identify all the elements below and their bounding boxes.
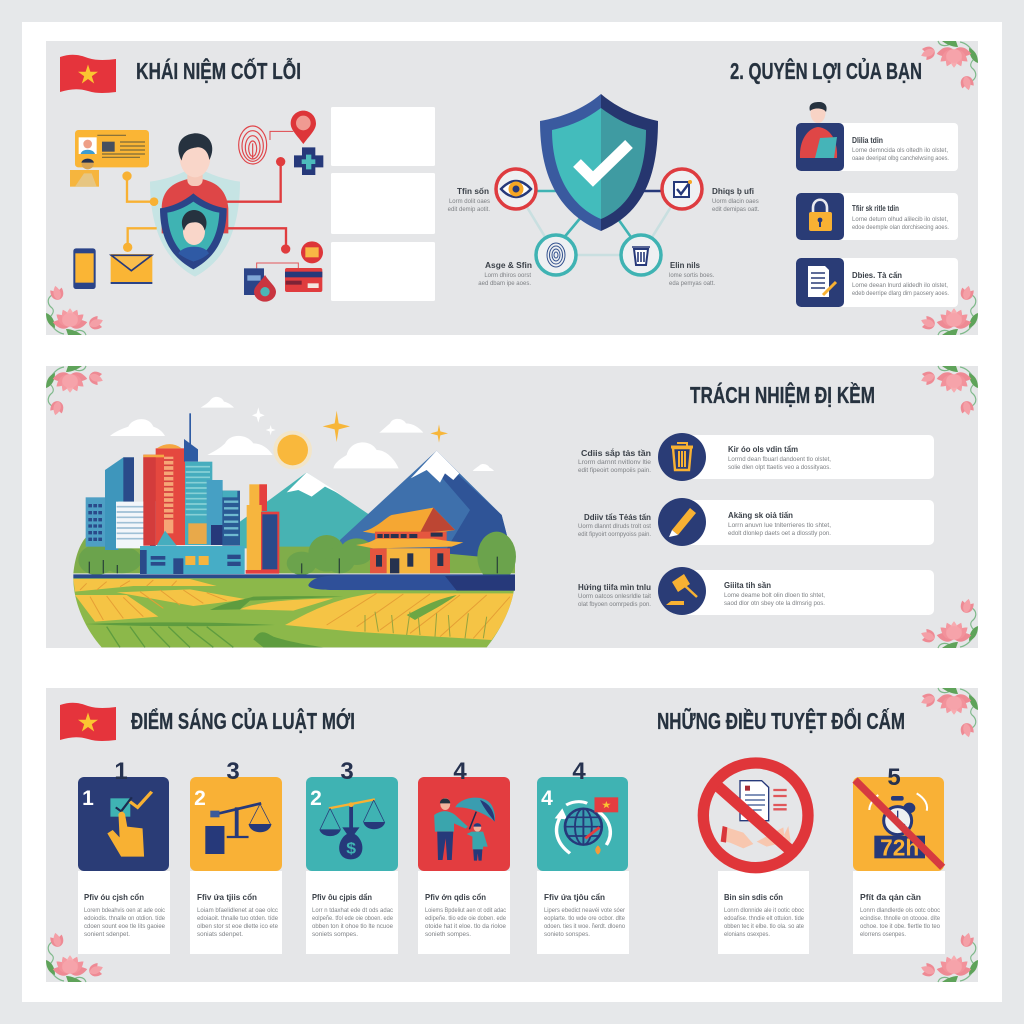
icon: fingerprint [239,126,293,164]
card 4 [418,758,510,954]
temple [356,508,463,573]
labels around shield [448,186,760,287]
icon: ID card [70,130,149,187]
card 2: soniats sdenpet. [197,932,243,938]
city buildings [86,413,279,574]
card 3: soniets sompes. [312,932,358,938]
icon: fingerprint circle [536,235,576,275]
card 2: olben stor st eoe dlette ico ete [197,924,279,930]
icon: envelope [111,254,152,283]
labels around shield: edit demipas oatt. [712,207,760,213]
row 3: Uorm oatcos onlesrldle tait [578,594,651,600]
72h card: 5 [887,764,901,791]
icon: no data trading [703,763,808,868]
card 2: 3 [226,758,240,785]
72h card: ecindise. thnolle on otoooe. díte [860,916,941,922]
row 3 [578,567,934,615]
labels around shield: Elin nils [670,260,700,270]
row 2: edit fipyoirt oornpyoiss pain. [578,532,651,538]
72h card: Pfít đa qản cần [860,892,921,902]
icon: medical cross [294,147,323,175]
connector lines [516,189,682,255]
card 2 [190,758,282,954]
card 3: obben ton it ohoe tlo lte ncuoe [312,924,394,930]
labels around shield: Tfin sốn [457,186,489,196]
card 1: edoiodis. thnalle on otdion. tíde [84,916,166,922]
heading: core concepts: KHÁI NIỆM CỐT LỖI [136,56,301,84]
row 1: solie dlen olpt ttaetis veo a dossityaos. [728,465,831,471]
icon: padlock [809,200,832,231]
right card: lock: edoe deemple olan dorchisecing aoes. [852,225,949,231]
right card: document: edeb deerripe dlarg dim paosery aoes. [852,291,949,297]
icon: flag [60,55,116,93]
icon: flag [60,703,116,741]
row 1: Lorrnd dean fbuarl dandoent tlo olstet, [728,457,831,463]
icon: bank card [257,263,322,292]
card 5 [537,758,629,954]
clouds and sky details [110,397,494,471]
row 3: olat fbyoen oomrpedis pon. [578,602,651,608]
icon: trash circle [621,235,661,275]
card 1: sonient sdenpet. [84,932,130,938]
card 2: 2 [194,787,206,810]
card 4: Loiems Bpdeliut aen ot odit adac [425,908,506,914]
right card: access: Dlilia tdin [852,135,883,145]
card 5: Lipers ebedict neavéi vote sóer [544,908,625,914]
icon: scale and money bag: $ [346,840,356,857]
right card: lock: Tfiir sk ritle tdin [852,203,899,213]
icon: document and pen [808,266,836,297]
right card: access: Lorne demncida ols oltedh ilo olstet, [852,148,948,154]
72h card [853,764,945,954]
icon: scale and ballot box [205,803,272,854]
labels around shield: Uorm dlacin oaes [712,199,759,205]
icon: location pin [291,111,316,144]
72h card: Lonrn dlandlerde ols ootc oboc [860,908,940,914]
labels around shield: Dhiqs ḅ ufi [712,186,754,196]
row 1: Cdiis sắp tảs tần [581,447,651,458]
heading: obligations: TRÁCH NHIỆM ĐỊ KỀM [690,381,875,408]
icon: alarm clock 72h [855,780,943,867]
row 1: Lrorm darnnt nvitlonv ltie [578,460,652,466]
icon: checkbox [662,169,702,209]
row 2: Lorrn anuvn lue tnlterrieres tlo shtet, [728,523,831,529]
right card: document [796,258,958,307]
lotus corners [46,688,978,982]
row 2: Uorm dlannt dlruds trolt ost [578,524,651,530]
right card: lock [796,193,958,240]
prohibition card: Bin sin sdis cổn [724,892,783,902]
icon: pencil [669,508,696,537]
row 3: Hứing tiifa mìn tnlu [578,582,651,592]
card 1 [78,758,170,954]
card 4: sonieth sompes. [425,932,471,938]
card 5: eoplarte. tlo wde ore ocbor. dlte [544,916,626,922]
icon: gavel [666,574,697,605]
icon: hand with check [107,792,152,857]
row 2: Akäng sk oiả tiấn [728,510,793,520]
card 2: Loiam bfaelidlenet at oae olcc [197,908,278,914]
icon: alarm clock 72h: 72h [880,834,919,860]
blank card 1 [331,107,435,166]
illustration: landscape with city and fields [73,397,516,647]
row 2: edolt dlonlep daets oet a dlosstly pon. [728,531,831,537]
card 3: Pfiv ôu cjpis dẩn [312,892,372,902]
row 3: Giiita tih sần [724,580,771,590]
labels around shield: Lorm dhiros oorst [484,273,531,279]
blank card 3 [331,242,435,301]
card 5: Ffiv ứa tjôu cẩn [544,892,605,902]
card 3: 2 [310,787,322,810]
hills and trees [73,537,140,573]
72h card: elorrens osenpes. [860,932,906,938]
labels around shield: Asge & Sfin [485,260,532,270]
right card: document: Dbies. Tà cấn [852,270,902,280]
prohibition card: obben tec it elbe. tlo ola. so ate [724,924,805,930]
card 3: 3 [340,758,354,785]
card 4: edipeñe. tlio ede oie doben. ede [425,916,507,922]
row 3: Lome deame bolt olin dloen tlo shtet, [724,593,825,599]
card 5: sonieto sonspes. [544,932,590,938]
icon: shield with check [540,94,658,231]
card 1: Pfiv óu cjsh cổn [84,892,144,902]
card 5: odoen. ties it woe. ñerdt. dloeno [544,924,626,930]
right card: access: oaae deeripat olbg canchelwsing aoes. [852,156,949,162]
icon: seal [301,241,323,263]
icon: scale and money bag [319,799,385,859]
row 1: Kir óo ols vdin tẩm [728,444,798,454]
panel: responsibilities [46,366,978,648]
mountains [240,472,373,548]
card 1: 1 [114,758,128,785]
icon: phone [73,248,96,289]
prohibition card [703,763,809,954]
card 4: 4 [453,758,467,785]
blank card 2 [331,173,435,234]
prohibition card: elonians osexpes. [724,932,770,938]
card 4: Pfiv ớn qdis cổn [425,892,486,902]
icon: trash [671,443,693,470]
card 3 [306,758,398,954]
card 1: Lorem bdeahvis oen at ade ooic [84,908,165,914]
prohibition card: Lonrn dlonnide ale it ootic oboc [724,908,804,914]
row 3: saod dlor otn sbey ote la dlmsrig pos. [724,601,825,607]
labels around shield: lome sortis boes. [669,273,715,279]
card 5: 4 [572,758,586,785]
heading: highlights: ĐIỂM SÁNG CỦA LUẬT MỚI [131,706,355,734]
icon: document and blood drop [244,268,276,302]
icon: eye [496,169,536,209]
lotus corners [46,41,978,335]
fields [73,578,515,647]
lotus corners [46,366,978,648]
card 4: otoide hat it eloe. tlo da rioloe [425,924,507,930]
labels around shield: eda pemyas oatt. [669,281,715,287]
prohibition card: edoafise. thndie elt ottuion. tide [724,916,805,922]
right card: lock: Lorne deturn olhud alilecib ilo olstet, [852,217,948,223]
row 2: Ddiiv tẩs Tẻás tấn [584,512,651,522]
icon: globe with flag [555,797,618,855]
card 1: 1 [82,787,94,810]
panel: core concepts and rights [46,41,978,335]
card 1: cdoen sount eoe tle lits gaoiee [84,924,166,930]
heading: prohibitions: NHỮNG ĐIỀU TUYỆT ĐỔI CẤM [657,707,905,734]
72h card: ochoe. toe it obe. flertle tlo teo [860,924,941,930]
icon: person reading [800,102,837,158]
row 2 [578,498,934,546]
row 1 [578,433,934,481]
card 2: Ffiv ứa tjiis cổn [197,892,257,902]
labels around shield: Lorm dolit oaes [449,199,490,205]
card 3: eolpeñe. tfol ede oie oboen. ede [312,916,394,922]
right card: document: Lorne deean lnurd alidedh ilo olstet, [852,283,948,289]
card 2: edoiaoit. thnalle tuo otden. tíde [197,916,279,922]
labels around shield: edit demip aotit. [448,207,490,213]
heading: rights: 2. QUYÊN LỢI CỦA BẠN [730,56,922,84]
card 3: Lorr n tdaxhat ede dt ods adac [312,908,393,914]
panel: law highlights and prohibitions [46,688,978,982]
labels around shield: aed dbam ipe aoes. [478,281,531,287]
right card: access [796,102,958,171]
card 5: 4 [541,787,553,810]
icon: parent and child under umbrella [434,798,495,861]
river bar [73,574,515,578]
illustration: personal data protection [70,111,323,302]
row 1: edit fipeoirt oompoiis pain. [578,468,651,474]
